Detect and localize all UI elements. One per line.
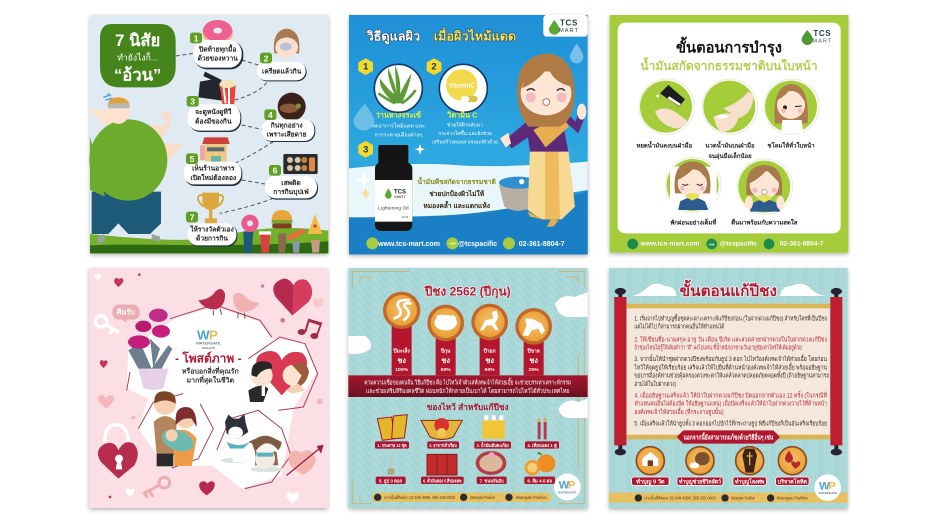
step 4: กินทุกอย่าง	[271, 121, 303, 129]
step 7: ให้รางวัลตัวเอง	[190, 225, 234, 234]
contact bar	[366, 237, 565, 249]
step 5: 5	[190, 154, 195, 164]
logo Watergate Pavilion badge: WATERGATE	[558, 490, 577, 494]
icon: key pink	[143, 477, 170, 498]
title badge: 7 นิสัย	[115, 31, 160, 50]
step 6	[265, 154, 318, 200]
logo Watergate Pavilion badge	[554, 474, 581, 500]
merit: coffin: ทำบุญโลงศพ	[735, 477, 765, 485]
logo Watergate Pavilion badge: WATERGATE	[818, 491, 837, 495]
contact bar: www.tcs-mart.com	[640, 241, 700, 248]
item 2: vitamin C: ช่วยให้ผิวกลับมา	[447, 122, 483, 129]
item 3: oil bottle: 3	[363, 144, 368, 154]
step 1: ด้วยของหวาน	[198, 54, 238, 63]
step 4: 4	[268, 110, 273, 120]
heading text: หรือบอกสิ่งที่คุณรัก	[182, 365, 239, 375]
item 2: vitamin C	[427, 58, 498, 145]
step 7	[186, 193, 237, 247]
item 1: aloe vera: ว่านหางจระเข้	[376, 110, 421, 119]
step 3: apply on face: ชโลมให้ทั่วใบหน้า	[767, 140, 815, 149]
step 2: 2	[264, 53, 269, 63]
zodiac medal: snake 100%	[383, 292, 420, 375]
logo Watergate Pavilion badge	[814, 474, 841, 501]
heading text: มากที่สุดในชีวิต	[187, 375, 235, 385]
zodiac medal: pig 50%: ชง	[441, 356, 450, 365]
instruction text: 1. เริ่มจากไปทำบุญซื้อชุดสะเดาะเคราะห์แก้ปีชงก่อน (ใบฝากดวงแก้ปีชง) สำหรับใครที่เป็นปีชง	[634, 313, 827, 322]
contact bar	[627, 239, 824, 249]
step 1: drop oil on palm	[636, 79, 694, 149]
panel: post a picture of what you love	[89, 268, 328, 508]
title badge	[100, 24, 176, 87]
heading: น้ำมันสกัดจากธรรมชาติบนใบหน้า	[640, 56, 818, 73]
merit: donate blood	[776, 447, 809, 485]
merit: save animals: ทำบุญช่วยชีวิตสัตว์	[679, 477, 721, 485]
step 2: warm oil in hands	[702, 79, 758, 160]
zodiac medal: monkey 50%: ชง	[485, 356, 494, 365]
item 2: vitamin C: เสริมสร้างคอลลาเจนแก่ผิวด้วย	[432, 138, 498, 145]
item 3: oil bottle	[358, 141, 412, 231]
step 5	[184, 137, 242, 186]
step 3: apply on face	[764, 79, 819, 149]
step 1: ปิดท้ายทุกมื้อ	[199, 44, 236, 54]
icon: hands holding junk food	[241, 210, 322, 253]
step 1: 1	[194, 33, 199, 43]
instruction text: ทำแทนคนอื่นไม่ต้องปัด ให้อธิษฐานแทน) เมื่อปัดเสร็จแล้วให้นำใบฝากดวงวางไว้ที่ด้านหน้า	[634, 399, 827, 408]
logo TCS mart	[802, 29, 832, 45]
step 5: wake up fresh	[731, 159, 798, 227]
character: girl in Thai dress	[500, 53, 586, 227]
contact bar: @tcspacific	[720, 241, 757, 248]
offering 2: gold boat	[421, 418, 462, 449]
decorative hearts	[94, 273, 324, 504]
zodiac medal: pig 50%	[427, 305, 464, 375]
icon: key white	[95, 316, 119, 334]
heading text: - โพสต์ภาพ -	[175, 351, 242, 366]
item 3: oil bottle: Lightening Oil	[378, 205, 409, 211]
contact bar: LINE	[709, 242, 715, 246]
instruction text: แต่ไม่ได้ไป ก็สามารถฝากคนอื่นให้ทำแทนได้	[634, 322, 724, 331]
scroll roller right	[830, 288, 842, 455]
step 1	[190, 20, 243, 69]
speech bubble badge	[112, 305, 140, 323]
other ways banner	[677, 430, 780, 444]
logo Watergate Pavilion: P	[209, 327, 218, 342]
white content card	[618, 23, 841, 233]
zodiac medal: tiger 25%: ชง	[529, 356, 538, 365]
step 2	[257, 29, 307, 81]
title badge: ทำยังไงก็...	[117, 52, 158, 63]
logo Watergate Pavilion badge: P	[828, 480, 836, 492]
offering 4: candles	[525, 417, 559, 449]
item 2: vitamin C: VitaminC	[449, 83, 475, 89]
explanation band: และช่วยเสริมสิริมงคลชีวิต ผ่อนหนักให้กลายเป็นเบาได้ โดยสามารถไปไหว้ได้ทั่วประเทศไทย	[366, 386, 570, 395]
step 3: จะดูหนังดูทีวี	[195, 108, 232, 117]
scroll paper	[627, 304, 830, 439]
ornamental frame corners	[352, 271, 584, 504]
title badge: “อ้วน”	[114, 66, 161, 85]
item 1: aloe vera: การระคายเคืองต่างๆ	[375, 132, 422, 139]
step 4	[262, 93, 315, 142]
instruction text: ไหว้ให้จุดธูปให้เรียบร้อย เสร็จแล้วให้ไปยืนที่ด้านหน้าองค์เทพเจ้าไท้ส่วยเอี้ย พร้อมอธิษฐาน	[634, 362, 828, 371]
contact bar: 02-361-8804-7	[519, 241, 565, 248]
zodiac medal: monkey 50%	[471, 304, 508, 375]
zodiac medal: monkey 50%: 50%	[485, 367, 495, 373]
zodiac medal: tiger 25%	[515, 308, 552, 375]
step 3: ต้องมีของกิน	[195, 116, 232, 125]
item 3: oil bottle: MART	[394, 194, 406, 199]
instruction text: 5. เมื่อเสร็จแล้วให้นำธูปทั้ง 3 ดอกออกไปปักไว้ที่กระถางธูป พิธีแก้ปีชงก็เป็นอันเสร็จเรียบร้อย	[634, 418, 827, 427]
footer contact bar: Watergate Pavillion	[470, 495, 495, 500]
offering 6: red paper sets	[421, 454, 464, 484]
character: overweight man	[89, 93, 183, 243]
instruction text	[634, 313, 829, 427]
offering 7: sweets: 7. ขนมจันอับ	[480, 477, 504, 483]
icon: heart lock	[98, 425, 138, 479]
title: ขั้นตอนแก้ปีชง	[680, 279, 777, 300]
step 7: 7	[190, 212, 195, 222]
step 5: wake up fresh: ตื่นมาพร้อมกับความสดใส	[731, 218, 798, 227]
hexagon outlines	[127, 305, 318, 489]
icon: flower pot	[128, 309, 172, 390]
step 2: เครียดแล้วกิน	[262, 66, 302, 75]
offering 3: oil bottles: 3. น้ำมันเติมตะเกียง	[477, 441, 509, 448]
offerings heading: ของไหว้ สำหรับแก้ปีชง	[427, 402, 509, 412]
panel: natural oil facial care steps	[610, 15, 848, 253]
step 5: เปิดใหม่ต้องลอง	[190, 173, 236, 182]
footer contact bar: ฝากนั้นที่ติดต่อ: 02-649-4998, 095-265-0000	[384, 494, 455, 500]
title: ปีชง 2562 (ปีกุน)	[424, 284, 511, 299]
oil description text: ช่วยปกป้องผิวไม่ให้	[429, 189, 485, 198]
zodiac medal: pig 50%: ปีกุน	[441, 348, 451, 355]
bottom blue band	[349, 190, 588, 254]
step 2: warm oil in hands: จนอุ่นมือเล็กน้อย	[708, 151, 752, 160]
logo Watergate Pavilion badge: P	[568, 480, 576, 492]
logo Watergate Pavilion: WATERGATE	[196, 341, 221, 346]
water bowl	[499, 177, 538, 211]
footer contact bar: Watergate Pavillion	[516, 495, 547, 500]
instruction text: 4. เมื่ออธิษฐานเสร็จแล้ว ให้นำใบฝากดวงแก้ปีชง ปัดออกจากตัวเอง 12 ครั้ง (ในกรณีที่	[634, 390, 827, 399]
logo Watergate Pavilion badge: W	[559, 480, 570, 492]
white central hexagon area	[127, 307, 317, 489]
zodiac medal: tiger 25%: ปีขาล	[527, 348, 540, 355]
logo TCS mart	[543, 15, 588, 37]
instruction text: อ่านได้ในใบฝากดวง)	[634, 380, 676, 388]
merit: donate blood: บริจาคโลหิต	[778, 477, 807, 485]
oil description text	[417, 176, 496, 210]
item 1: aloe vera: 1	[363, 62, 368, 72]
clouds beside title	[632, 284, 825, 296]
instruction text: 2. ให้เขียนชื่อ-นามสกุล อายุ วัน เดือน ปีเกิด และสวดสาธกฝากดวงในใบฝากดวงแก้ปีชง	[634, 334, 827, 343]
instruction text: ขอบารมีองค์ท่านช่วยคุ้มครองดวงชะตาให้แคล้วคลาดปลอดภัยตลอดทั้งปี (ถ้าอธิษฐานสามารถ	[634, 371, 829, 380]
logo Watergate Pavilion badge: W	[819, 480, 830, 492]
panel: sunburn skin care	[349, 15, 588, 254]
title: วิธีดูแลผิว	[366, 30, 420, 45]
connecting dashed lines	[176, 53, 273, 213]
merit: coffin	[733, 447, 766, 485]
oil description text: น้ำมันพืชสกัดจากธรรมชาติ	[417, 176, 496, 186]
footer contact bar	[372, 493, 552, 502]
offering 8: oranges: 8. ส้ม 4-5 ผล	[527, 477, 552, 483]
item 3: oil bottle: 10ml	[402, 215, 409, 219]
footer contact bar: ฝากนั้นที่ติดต่อ: 02-649-4998, 095-265-0000	[644, 495, 716, 501]
offering 5: incense	[376, 454, 406, 484]
item 1: aloe vera	[358, 58, 425, 139]
icon: birds on line	[198, 289, 260, 319]
logo TCS mart: MART	[812, 38, 832, 44]
step 6: เสพติด	[281, 179, 301, 187]
step 4: เพราะเสียดาย	[267, 131, 307, 139]
white wave swoosh	[349, 162, 588, 217]
logo TCS mart: TCS	[813, 29, 831, 38]
offering 4: candles: 4. เทียนแดง 1 คู่	[527, 442, 557, 449]
zodiac medal: snake 100%: ชง	[397, 356, 406, 365]
zodiac medal: monkey 50%: ปีวอก	[483, 348, 496, 355]
zodiac medal: tiger 25%: 25%	[529, 367, 539, 373]
footer contact bar: Watergate Pavillion	[777, 496, 808, 501]
zodiac medal: pig 50%: 50%	[441, 367, 451, 373]
contact bar: LINE	[449, 242, 456, 246]
step 4: rest fully: พักผ่อนอย่างเต็มที่	[670, 218, 716, 227]
logo Watergate Pavilion: W	[197, 327, 210, 342]
offering 2: gold boat: 2. อาหารเจ้าเรือน	[429, 442, 457, 448]
scroll roller left	[614, 288, 626, 455]
instruction text: องค์เทพเจ้าไท้ส่วยเอี้ย (ที่กระถางธูปนั้น)	[634, 407, 724, 416]
logo TCS mart: MART	[559, 28, 579, 34]
clouds	[348, 292, 588, 418]
step 2: warm oil in hands: นวดน้ำมันบนฝ่ามือ	[705, 139, 755, 149]
item 2: vitamin C: วิตามิน C	[446, 110, 478, 119]
offering 6: red paper sets: 6. ตั๋วเงินทอง 5 สีของเทพ	[423, 477, 461, 483]
logo TCS mart: TCS	[560, 18, 578, 27]
icon: heart with arrow	[287, 445, 324, 475]
item 1: aloe vera: ลดอาการไหม้แดด และ	[372, 121, 425, 129]
footer contact bar: Watergate Pavillion	[731, 496, 755, 501]
step 6: การกินบุปเฟ่	[273, 188, 309, 196]
item 2: vitamin C: กระจ่างใสขึ้น และยังช่วย	[438, 128, 492, 137]
offering 5: incense: 5. ธูป 3 ดอก	[379, 477, 402, 484]
step 1: drop oil on palm: หยดน้ำมันลงบนฝ่ามือ	[636, 139, 693, 149]
icon: kissing couple and heart	[248, 351, 309, 402]
contact bar: @tcspacific	[458, 241, 497, 248]
speech bubble badge: คืนรับ	[116, 308, 135, 317]
step 7: ด้วยการกิน	[196, 234, 228, 243]
zodiac medal: snake 100%: ปีมะเส็ง	[393, 347, 410, 355]
step 6: 6	[273, 166, 278, 176]
heading	[640, 36, 818, 73]
panel: steps to resolve clash year	[609, 268, 848, 508]
offering 8: oranges	[524, 453, 555, 484]
merit: save animals	[677, 447, 723, 485]
title: เมื่อผิวไหม้แดด	[434, 27, 516, 44]
zodiac medal: snake 100%: 100%	[395, 367, 409, 373]
logo Watergate Pavilion: PAVILLION	[202, 346, 215, 350]
sparkles and drops	[353, 43, 583, 199]
item 2: vitamin C: 2	[431, 62, 437, 72]
panel: Chinese zodiac clash year 2562	[348, 268, 588, 508]
merit: 9 temples: ทำบุญ 9 วัด	[636, 478, 665, 485]
instruction text: 3. จากนั้นให้นำชุดฝากดวงปีชงพร้อมกับธูป 3 ดอก ไปไหว้องค์เทพเจ้าไท้ส่วยเอี้ย โดยก่อน	[634, 354, 828, 363]
step 5: เห็นร้านอาหาร	[192, 164, 235, 173]
instruction text: ถ้าช่องไหนไม่รู้ให้เติมคำว่า "ดี" ลงไปแทน ที่น้ำหนักอาชามวันอายุขัยเท่าไหร่ให้เติมอยู่ด้วย	[634, 343, 802, 352]
explanation band	[348, 375, 588, 397]
merit: 9 temples	[632, 447, 669, 485]
icon: family with baby	[154, 391, 197, 466]
icon: music notes	[298, 319, 322, 339]
offering 7: sweets	[476, 451, 507, 484]
step 3	[187, 72, 241, 132]
step 3: 3	[190, 97, 195, 107]
item 3: oil bottle: TCS	[394, 189, 406, 195]
explanation band: ตามความเชื่อของคนจีน วิธีแก้ปีชง คือ ไปไหว้เจ้าตัวเล่ห์เทพเจ้าไท้ส่วยเอี๊ย จะช่วยบรรเทาเคราะห์กรรม	[364, 377, 571, 386]
heading text	[175, 351, 242, 385]
ground hills	[90, 228, 328, 253]
offering 3: oil bottles	[474, 415, 511, 449]
logo Watergate Pavilion	[196, 327, 221, 350]
other ways banner: นอกจากนี้ยังสามารถแก้ชงด้วยวิธีอื่นๆ เช่น	[683, 432, 774, 442]
offering 1: gold paper	[375, 415, 409, 449]
heading: ขั้นตอนการบำรุง	[676, 36, 782, 56]
offering 1: gold paper: 1. กระดาษ 12 ชุด	[377, 443, 407, 449]
panel: 7 habits that make you fat	[89, 15, 328, 253]
title	[366, 27, 516, 45]
contact bar: 02-361-8804-7	[780, 241, 824, 248]
oil description text: หมองคล้ำ และแตกแห้ง	[423, 200, 490, 210]
footer contact bar	[609, 493, 848, 503]
step 4: rest fully	[666, 157, 721, 227]
contact bar: www.tcs-mart.com	[377, 241, 440, 248]
icon: husky and puppy	[221, 414, 283, 472]
